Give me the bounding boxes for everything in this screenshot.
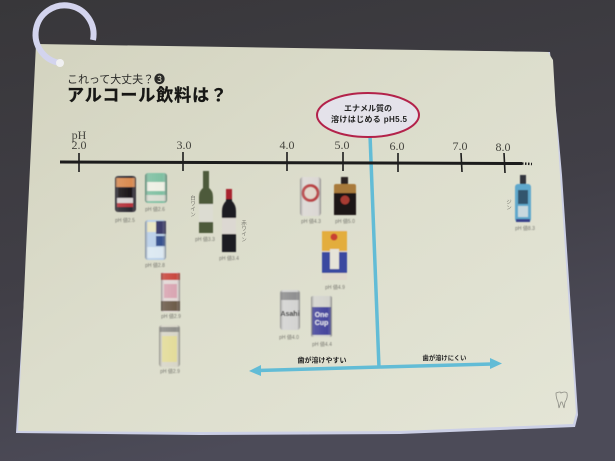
drink: white wine bottle pH 3.3 — [195, 171, 215, 243]
drink: chuhai can pH 2.8 — [145, 220, 166, 269]
drink: chuhai can pH 2.8: pH 値2.8 — [145, 262, 165, 269]
drink: Asahi can pH 4.0 — [279, 290, 300, 341]
pH axis: pH — [72, 128, 87, 142]
arrow: acidic side, teeth dissolve easily: 歯が溶けやすい — [298, 356, 346, 364]
drink: can pH 2.9 — [161, 272, 181, 320]
drink: can pH 2.9: pH 値2.9 — [161, 313, 181, 320]
pH axis: 3.0 — [176, 138, 192, 152]
drink: Asahi can pH 4.0: Asahi — [280, 311, 300, 318]
arrow: alkaline side, teeth dissolve less easily — [380, 353, 502, 369]
drink: beer can pH 4.3 — [300, 177, 321, 225]
drink: One Cup sake pH 4.4 — [311, 296, 332, 348]
drink: can pH 2.9: pH 値2.9 — [160, 368, 180, 375]
pH axis — [60, 128, 532, 173]
drink: One Cup sake pH 4.4: One — [315, 312, 328, 319]
pH axis: 4.0 — [280, 138, 294, 152]
drink: Asahi can pH 4.0: pH 値4.0 — [279, 334, 299, 341]
label: gin: ジン — [505, 199, 512, 210]
drink: can pH 2.9 — [159, 325, 180, 375]
arrow: acidic side, teeth dissolve easily — [249, 356, 380, 376]
title: アルコール飲料は？ — [67, 86, 227, 105]
panel: paper sheet — [16, 44, 578, 435]
pH axis: 8.0 — [496, 140, 510, 154]
callout: enamel pH line: エナメル質の — [344, 103, 392, 113]
drink: gin bottle pH 8.3: pH 値8.3 — [515, 225, 535, 232]
drink: chuhai can pH 2.5 — [115, 176, 136, 224]
drink: One Cup sake pH 4.4: pH 値4.4 — [312, 341, 332, 348]
drink: whisky bottle pH 5.0 — [334, 177, 356, 225]
icon: tooth — [556, 392, 567, 408]
drink: One Cup sake pH 4.4: Cup — [315, 320, 328, 327]
drink: beer can pH 4.3: pH 値4.3 — [301, 218, 321, 225]
drink: gin bottle pH 8.3 — [515, 175, 535, 232]
label: red wine: 赤ワイン — [240, 219, 247, 242]
icon: binder ring — [36, 5, 94, 67]
pH axis: 7.0 — [452, 139, 468, 153]
pH axis: 6.0 — [390, 139, 404, 153]
drink: chuhai can pH 2.6: pH 値2.6 — [145, 206, 165, 213]
subtitle: これって大丈夫？❸ — [67, 72, 165, 86]
drink: sake carton pH 4.9: pH 値4.9 — [325, 284, 345, 291]
pH axis: 5.0 — [334, 138, 350, 152]
callout: enamel pH line — [317, 93, 419, 368]
callout: enamel pH line: 溶けはじめる pH5.5 — [331, 114, 408, 124]
pH axis: 2.0 — [72, 138, 86, 152]
drink: white wine bottle pH 3.3: pH 値3.3 — [195, 236, 215, 243]
drink: whisky bottle pH 5.0: pH 値5.0 — [335, 218, 355, 225]
drink: sake carton pH 4.9 — [322, 230, 347, 291]
drink: chuhai can pH 2.5: pH 値2.5 — [115, 217, 135, 224]
drink: red wine bottle pH 3.4: pH 値3.4 — [219, 255, 239, 262]
arrow: alkaline side, teeth dissolve less easily: 歯が溶けにくい — [423, 353, 466, 362]
drink: chuhai can pH 2.6 — [145, 173, 167, 213]
drink: red wine bottle pH 3.4 — [219, 189, 239, 262]
label: white wine: 白ワイン — [189, 194, 196, 217]
